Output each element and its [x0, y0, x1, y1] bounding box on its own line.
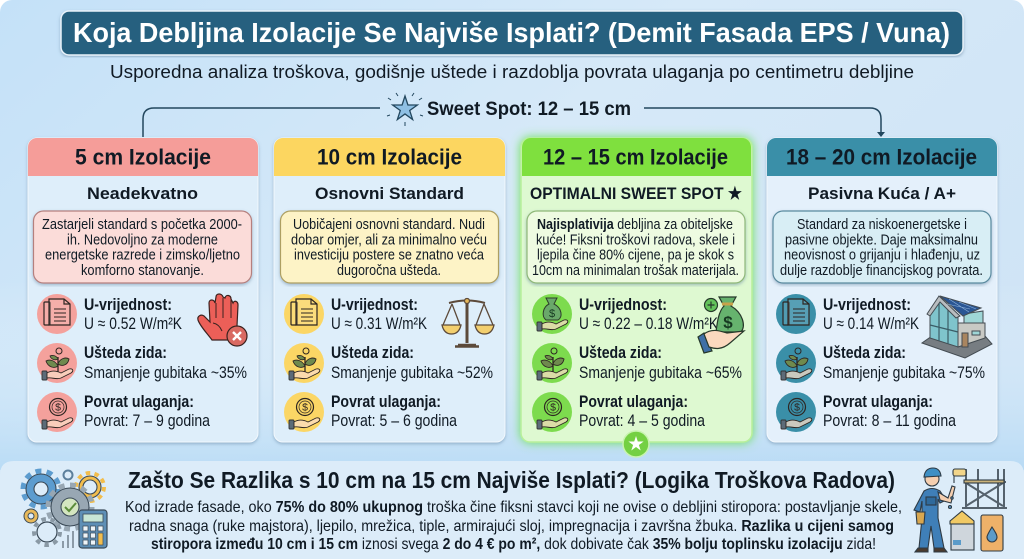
- row: payback: [37, 392, 210, 432]
- description callout: ljepila čine 80% cijene, pa je skok s: [537, 246, 734, 264]
- heading: 10 cm: 10 cm Izolacije: [317, 144, 462, 170]
- row: payback: Povrat ulaganja:: [84, 392, 194, 411]
- row: savings: Smanjenje gubitaka ~52%: [331, 363, 493, 382]
- icon: passive house: [922, 296, 992, 358]
- row: U-value: U-vrijednost:: [331, 295, 418, 314]
- heading: 5 cm: 5 cm Izolacije: [75, 144, 211, 170]
- row: savings: [37, 343, 247, 383]
- row: savings: Smanjenje gubitaka ~35%: [84, 363, 247, 382]
- heading: 5 cm: [28, 138, 258, 176]
- row: U-value: U-vrijednost:: [579, 295, 667, 314]
- subtitle: Usporedna analiza troškova, godišnje uštede i razdoblja povrata ulaganja po centimetru debljine: [110, 61, 914, 82]
- row: U-value: $: [549, 308, 555, 320]
- row: savings: [776, 343, 985, 383]
- heading: 12-15 cm: [522, 138, 751, 176]
- description callout: investiciju postere se znatno veća: [294, 246, 485, 264]
- description callout: [527, 211, 745, 283]
- row: payback: Povrat: 5 – 6 godina: [331, 411, 457, 430]
- row: U-value: [532, 294, 719, 334]
- description callout: pasivne objekte. Daje maksimalnu: [785, 232, 978, 248]
- description callout: dulje razdoblje financijskog povrata.: [780, 262, 983, 279]
- icon: balance scale: [442, 298, 494, 346]
- row: savings: Ušteda zida:: [84, 343, 167, 362]
- description callout: Standard za niskoenergetske i: [797, 216, 967, 233]
- row: U-value: [284, 294, 428, 334]
- description callout: neovisnost o grijanju i hlađenju, uz: [784, 246, 980, 264]
- row: payback: Povrat ulaganja:: [579, 392, 688, 411]
- row: payback: [284, 392, 457, 432]
- panel: bottom explanation: [0, 461, 1024, 559]
- subheading: Osnovni Standard: [315, 184, 464, 203]
- row: U-value: U ≈ 0.52 W/m²K: [84, 314, 183, 333]
- sweet spot label: Sweet Spot: 12 – 15 cm: [427, 99, 631, 120]
- row: payback: Povrat: 4 – 5 godina: [579, 411, 705, 430]
- description callout: energetske razrede i zimsko/ljetno: [45, 246, 240, 264]
- icon: money bag in hand: $: [723, 313, 733, 332]
- row: payback: Povrat ulaganja:: [331, 392, 441, 411]
- heading: 12-15 cm: 12 – 15 cm Izolacije: [543, 144, 728, 170]
- row: payback: Povrat: 8 – 11 godina: [823, 411, 956, 430]
- heading: 18-20 cm: 18 – 20 cm Izolacije: [786, 144, 977, 170]
- title banner: Koja Debljina Izolacije Se Najviše Isplati? (Demit Fasada EPS / Vuna): [73, 17, 950, 48]
- row: U-value: U ≈ 0.14 W/m²K: [823, 314, 920, 333]
- row: savings: Smanjenje gubitaka ~65%: [579, 363, 742, 382]
- panel: 10 cm: [274, 138, 505, 442]
- row: U-value: [37, 294, 183, 334]
- bottom body text: radna snaga (ruke majstora), ljepilo, mrežica, tiple, armirajući sloj, impregnacija i završna žbuka. Razlika u cijeni samog: [129, 518, 894, 535]
- heading: 10 cm: [274, 138, 505, 176]
- bottom body text: stiropora između 10 cm i 15 cm iznosi svega 2 do 4 € po m², dok dobivate čak 35% bolju toplinsku izolaciju zida!: [151, 536, 876, 553]
- subheading: Pasivna Kuća / A+: [808, 184, 956, 203]
- bottom body text: Kod izrade fasade, oko 75% do 80% ukupnog troška čine fiksni stavci koji ne ovise o debljini stiropora: postavljanje skele,: [125, 499, 902, 516]
- icon: money bag in hand: [698, 297, 744, 353]
- description callout: dobar omjer, ali za minimalno veću: [291, 232, 487, 248]
- subheading: OPTIMALNI SWEET SPOT ★: [530, 184, 743, 203]
- panel: 5 cm: [28, 138, 258, 442]
- badge: star: [623, 431, 649, 457]
- row: payback: [776, 392, 956, 432]
- row: U-value: U-vrijednost:: [84, 295, 172, 314]
- row: payback: [532, 392, 705, 432]
- description callout: Najisplativija debljina za obiteljske: [537, 216, 733, 233]
- panel: 12-15 cm: [521, 138, 752, 442]
- bottom body text: [125, 499, 902, 553]
- row: savings: Ušteda zida:: [823, 343, 906, 362]
- panel: 18-20 cm: [767, 138, 997, 442]
- description callout: Zastarjeli standard s početka 2000-: [42, 216, 242, 233]
- row: savings: [532, 343, 742, 383]
- row: U-value: U ≈ 0.22 – 0.18 W/m²K: [579, 314, 719, 333]
- row: savings: Ušteda zida:: [579, 343, 662, 362]
- description callout: kuće! Fiksni troškovi radova, skele i: [536, 232, 735, 248]
- description callout: Uobičajeni osnovni standard. Nudi: [293, 216, 485, 233]
- row: savings: Ušteda zida:: [331, 343, 414, 362]
- title banner: [61, 11, 963, 55]
- bottom heading: Zašto Se Razlika s 10 cm na 15 cm Najviše Isplati? (Logika Troškova Radova): [128, 467, 895, 493]
- row: U-value: U ≈ 0.31 W/m²K: [331, 314, 428, 333]
- icon: stop hand: [198, 294, 247, 346]
- icon: gears and calculator: [23, 470, 107, 548]
- icon: sweet spot star: [387, 93, 423, 126]
- description callout: [773, 211, 991, 283]
- heading: 18-20 cm: [767, 138, 997, 176]
- description callout: dugoročna ušteda.: [337, 262, 441, 279]
- description callout: komforno stanovanje.: [81, 262, 204, 279]
- row: U-value: [776, 294, 920, 334]
- row: payback: Povrat ulaganja:: [823, 392, 933, 411]
- row: savings: Smanjenje gubitaka ~75%: [823, 363, 985, 382]
- sweet spot connector: [143, 108, 885, 137]
- row: savings: [284, 343, 493, 383]
- description callout: 10cm na minimalan trošak materijala.: [532, 262, 739, 279]
- row: U-value: U-vrijednost:: [823, 295, 911, 314]
- row: payback: Povrat: 7 – 9 godina: [84, 411, 210, 430]
- description callout: [280, 211, 498, 283]
- icon: painter and scaffolding: [914, 468, 1007, 552]
- subheading: Neadekvatno: [87, 184, 198, 203]
- description callout: [34, 211, 252, 283]
- description callout: ih. Nedovoljno za moderne: [67, 232, 218, 248]
